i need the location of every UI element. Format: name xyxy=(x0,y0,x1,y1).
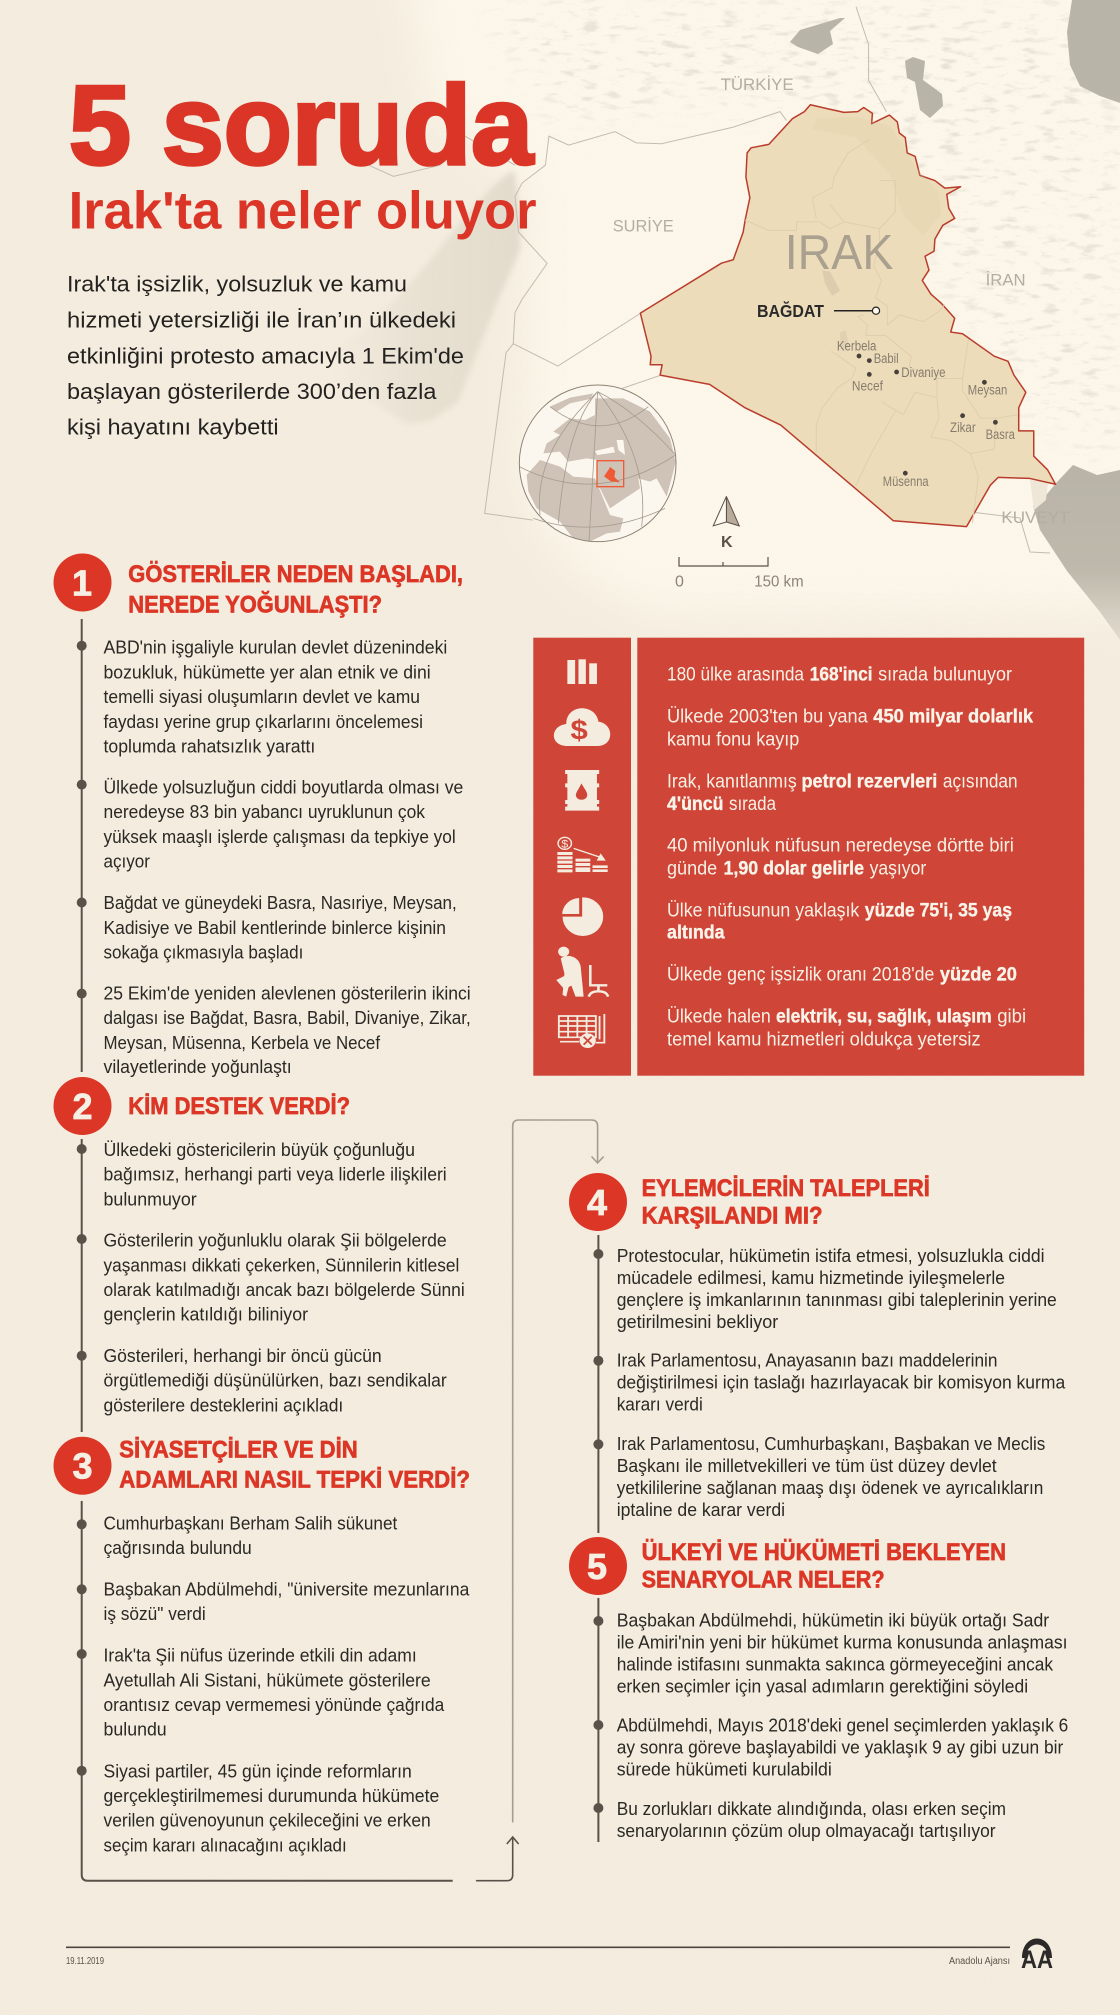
text 4: mücadele edilmesi, kamu hizmetinde iyileşmelerle xyxy=(617,1267,1005,1288)
text 4: Irak Parlamentosu, Anayasanın bazı maddelerinin xyxy=(617,1350,998,1371)
map labels: cities xyxy=(837,338,1015,489)
map: water bodies xyxy=(790,0,1120,640)
section 5 xyxy=(569,1537,1068,1842)
text 3: bulundu xyxy=(104,1719,167,1740)
fact: corruption rank: 168'inci xyxy=(810,665,873,686)
text 4: kararı verdi xyxy=(617,1394,703,1415)
badge 3: 3 xyxy=(72,1446,93,1487)
text 3 xyxy=(104,1512,470,1855)
flow connector: section 3 to section 4 xyxy=(477,1120,603,1881)
badge 2: 2 xyxy=(72,1086,93,1127)
badge 3 xyxy=(54,1437,112,1495)
heading 1 xyxy=(128,561,463,618)
text 4: getirilmesini bekliyor xyxy=(617,1311,778,1332)
text 2: Ülkedeki göstericilerin büyük çoğunluğu xyxy=(104,1139,415,1160)
map labels: cities: Zikar xyxy=(950,420,976,435)
fact: lost funds: kamu fonu kayıp xyxy=(667,729,799,750)
timeline 5 xyxy=(593,1598,603,1842)
text 1: dalgası ise Bağdat, Basra, Babil, Divaniye, Zikar, xyxy=(104,1007,471,1028)
timeline 3 xyxy=(77,1501,453,1881)
text 3: çağrısında bulundu xyxy=(104,1537,252,1558)
fact: lost funds: Ülkede 2003'ten bu yana xyxy=(667,707,868,728)
fact: public services: elektrik, su, sağlık, ulaşım xyxy=(776,1007,992,1028)
text 1: toplumda rahatsızlık yarattı xyxy=(104,736,315,756)
northern mountains xyxy=(812,117,941,236)
text 1: Ülkede yolsuzluğun ciddi boyutlarda olması ve xyxy=(104,777,463,798)
map: neighbouring country borders xyxy=(369,7,886,520)
text 5: Bu zorlukları dikkate alındığında, olası erken seçim xyxy=(617,1798,1006,1819)
badge 5: 5 xyxy=(587,1546,607,1587)
text 1: bozukluk, hükümette yer alan etnik ve dini xyxy=(104,661,431,682)
icon: money cloud: $ xyxy=(571,715,588,746)
fact: oil reserves: 4'üncü xyxy=(667,794,724,815)
text 2: Gösterilerin yoğunluklu olarak Şii bölgelerde xyxy=(104,1230,447,1251)
fact: corruption rank xyxy=(667,665,1013,686)
icon: failing services xyxy=(559,1014,604,1048)
text 5: Abdülmehdi, Mayıs 2018'deki genel seçimlerden yaklaşık 6 xyxy=(617,1715,1068,1736)
heading 1: NEREDE YOĞUNLAŞTI? xyxy=(128,590,382,618)
map labels: neighbouring countries: KUVEYT xyxy=(1001,508,1069,527)
section 4 xyxy=(569,1173,1066,1533)
heading 5 xyxy=(642,1539,1006,1593)
text 2: bulunmuyor xyxy=(104,1188,197,1209)
map labels: neighbouring countries xyxy=(613,75,1069,527)
text 3: orantısız cevap vermemesi yönünde çağrıda xyxy=(104,1694,445,1715)
panel: key facts xyxy=(637,638,1084,1076)
fact: public services: temel kamu hizmetleri oldukça yetersiz xyxy=(667,1029,981,1050)
badge 1 xyxy=(54,554,112,612)
fact: youth unemployment: yüzde 20 xyxy=(940,965,1017,986)
Mediterranean Sea xyxy=(330,170,520,424)
text 4: iptaline de karar verdi xyxy=(617,1499,785,1520)
Iraq land shape xyxy=(640,105,1055,527)
fact: public services xyxy=(667,1007,1026,1050)
section 1 xyxy=(54,554,471,1077)
text 1: yüksek maaşlı işlerde çalışması da tepkiye yol xyxy=(104,826,456,847)
text 1: Bağdat ve güneydeki Basra, Nasıriye, Meysan, xyxy=(104,892,457,913)
heading 4: KARŞILANDI MI? xyxy=(642,1202,823,1229)
map labels: cities: Kerbela xyxy=(837,338,877,353)
text 5: Başbakan Abdülmehdi, hükümetin iki büyük ortağı Sadr xyxy=(617,1610,1049,1631)
text 4: Başkanı ile milletvekilleri ve tüm üst düzey devlet xyxy=(617,1455,997,1476)
text 1: açıyor xyxy=(104,850,150,872)
text 5: erken seçimler için yasal adımların gerektiğini söyledi xyxy=(617,1676,1028,1697)
text 1: Meysan, Müsenna, Kerbela ve Necef xyxy=(104,1032,381,1053)
map labels: cities: Meysan xyxy=(968,383,1007,398)
intro text: Irak'ta işsizlik, yolsuzluk ve kamu xyxy=(67,272,407,297)
subtitle: Irak'ta neler oluyor xyxy=(69,181,537,240)
heading 3 xyxy=(119,1437,470,1494)
fact: corruption rank: sırada bulunuyor xyxy=(878,665,1013,686)
fact: oil reserves: petrol rezervleri xyxy=(802,771,937,792)
logo: Anadolu Agency: AA xyxy=(1021,1946,1053,1974)
text 3: verilen güvenoyunun çekileceğini ve erken xyxy=(104,1810,431,1831)
intro text: etkinliğini protesto amacıyla 1 Ekim'de xyxy=(67,343,464,368)
text 4: değiştirilmesi için taslağı hazırlayacak bir komisyon kurma xyxy=(617,1372,1066,1393)
text 3: Ayetullah Ali Sistani, hükümete gösterilere xyxy=(104,1669,431,1690)
map: Kuwait border xyxy=(971,512,1050,553)
map labels: neighbouring countries: İRAN xyxy=(986,270,1026,290)
fact: public services: gibi xyxy=(997,1007,1026,1028)
intro text: hizmeti yetersizliği ile İran’ın ülkedeki xyxy=(67,307,456,332)
fact: young population: yüzde 75'i, 35 yaş xyxy=(865,901,1012,922)
fact: poverty: 40 milyonluk nüfusun neredeyse dörtte biri xyxy=(667,836,1014,857)
text 3: Siyasi partiler, 45 gün içinde reformların xyxy=(104,1760,412,1781)
fact: oil reserves: açısından xyxy=(943,771,1018,792)
fact: poverty: günde xyxy=(667,859,717,880)
text 2: olarak katılmadığı ancak bazı bölgelerde Sünni xyxy=(104,1279,465,1300)
fact: youth unemployment: Ülkede genç işsizlik oranı 2018'de xyxy=(667,965,934,986)
fact: public services: Ülkede halen xyxy=(667,1007,771,1028)
text 4: gençlere iş imkanlarının tanınması gibi taleplerinin yerine xyxy=(617,1289,1057,1310)
scale bar xyxy=(675,557,804,591)
text 2: örgütlemediği düşünülürken, bazı sendikalar xyxy=(104,1370,447,1391)
province borders xyxy=(745,139,1018,523)
north arrow xyxy=(713,496,739,551)
north arrow: K xyxy=(721,534,733,551)
text 1: neredeyse 83 bin yabancı uyruklunun çok xyxy=(104,801,426,822)
heading 4 xyxy=(642,1175,930,1229)
fact: oil reserves: sırada xyxy=(729,794,776,815)
heading 3: ADAMLARI NASIL TEPKİ VERDİ? xyxy=(119,1467,470,1494)
map label: Baghdad with leader line xyxy=(757,300,880,321)
heading 5: ÜLKEYİ VE HÜKÜMETİ BEKLEYEN xyxy=(642,1539,1006,1566)
heading 2: KİM DESTEK VERDİ? xyxy=(128,1093,350,1120)
badge 5 xyxy=(569,1537,627,1595)
text 3: seçim kararı alınacağını açıkladı xyxy=(104,1834,347,1855)
timeline 2 xyxy=(77,1139,87,1432)
text 1: faydası yerine grup çıkarlarını öncelemesi xyxy=(104,711,423,732)
heading 5: SENARYOLAR NELER? xyxy=(642,1566,885,1593)
map labels: cities: Basra xyxy=(986,427,1015,442)
text 1 xyxy=(104,637,471,1077)
title: 5 soruda xyxy=(69,63,534,188)
text 3: gerçekleştirilmemesi durumunda hükümete xyxy=(104,1785,439,1806)
light land area of the map xyxy=(400,0,1120,615)
text 1: ABD'nin işgaliyle kurulan devlet düzenindeki xyxy=(104,637,447,658)
text 1: 25 Ekim'de yeniden alevlenen gösterilerin ikinci xyxy=(104,983,471,1004)
heading 4: EYLEMCİLERİN TALEPLERİ xyxy=(642,1175,930,1202)
terrain texture xyxy=(480,0,1120,470)
fact: oil reserves: Irak, kanıtlanmış xyxy=(667,771,797,792)
icon: money cloud xyxy=(554,708,610,746)
map labels: cities: Divaniye xyxy=(901,365,946,380)
fact: lost funds xyxy=(667,707,1034,750)
icon: falling income: $ xyxy=(561,837,569,850)
intro text: kişi hayatını kaybetti xyxy=(67,414,279,439)
text 1: Kadisiye ve Babil kentlerinde binlerce kişinin xyxy=(104,917,446,938)
timeline 4 xyxy=(593,1235,603,1533)
fact: young population xyxy=(667,901,1012,944)
scale bar: 0 xyxy=(675,574,684,591)
text 5: sürede hükümeti kurulabildi xyxy=(617,1759,832,1780)
heading 3: SİYASETÇİLER VE DİN xyxy=(119,1437,358,1464)
locator globe xyxy=(519,385,676,542)
fact: young population: altında xyxy=(667,923,725,944)
icon: pie chart xyxy=(562,897,603,936)
map: Iraq xyxy=(640,105,1055,527)
map labels: neighbouring countries: SURİYE xyxy=(613,216,674,236)
map labels: neighbouring countries: TÜRKİYE xyxy=(721,75,794,94)
text 4: yetkililerine sağlanan maaş dışı ödenek ve ayrıcalıkların xyxy=(617,1477,1043,1498)
text 2: gösterilere desteklerini açıkladı xyxy=(104,1394,343,1415)
text 3: Başbakan Abdülmehdi, "üniversite mezunlarına xyxy=(104,1578,470,1599)
icon: falling income xyxy=(557,837,608,872)
scale bar: 150 km xyxy=(754,574,804,591)
text 2 xyxy=(104,1139,465,1415)
section 3 xyxy=(54,1437,470,1881)
timeline 1 xyxy=(77,619,87,1072)
section 2 xyxy=(54,1077,465,1432)
text 1: temelli siyasi oluşumların devlet ve kamu xyxy=(104,686,420,707)
map labels: cities: Babil xyxy=(874,351,899,366)
text 2: bağımsız, herhangi parti veya liderle ilişkileri xyxy=(104,1164,447,1185)
badge 2 xyxy=(54,1077,112,1135)
badge 4: 4 xyxy=(587,1182,607,1223)
date: 19.11.2019 xyxy=(66,1956,104,1967)
text 5: halinde istifasını sunmakta sakınca görmeyeceğini ancak xyxy=(617,1654,1054,1675)
fact: young population: Ülke nüfusunun yaklaşık xyxy=(667,901,860,922)
fact: oil reserves xyxy=(667,771,1018,815)
fact: poverty: 1,90 dolar gelirle xyxy=(724,859,864,880)
text 2: Gösterileri, herhangi bir öncü gücün xyxy=(104,1345,382,1366)
text 5: ile Amiri'nin yeni bir hükümet kurma konusunda anlaşması xyxy=(617,1632,1068,1653)
icon: unemployed person xyxy=(556,947,608,997)
text 4 xyxy=(617,1245,1066,1520)
map label: Baghdad with leader line: BAĞDAT xyxy=(757,300,824,321)
text 2: gençlerin katıldığı biliniyor xyxy=(104,1304,308,1325)
text 3: Irak'ta Şii nüfus üzerinde etkili din adamı xyxy=(104,1645,417,1666)
intro text: başlayan gösterilerde 300’den fazla xyxy=(67,379,437,404)
map label: IRAK: IRAK xyxy=(785,226,894,280)
icon: bar chart xyxy=(567,659,597,684)
heading 1: GÖSTERİLER NEDEN BAŞLADI, xyxy=(128,561,463,588)
text 2: yaşanması dikkati çekerken, Sünnilerin kitlesel xyxy=(104,1254,459,1275)
fact: corruption rank: 180 ülke arasında xyxy=(667,665,804,686)
footer xyxy=(66,1938,1053,1974)
map labels: cities: Necef xyxy=(852,379,883,394)
salt lakes xyxy=(822,270,840,296)
intro text xyxy=(67,272,464,439)
inset: Iraq marker xyxy=(597,461,624,487)
badge 4 xyxy=(569,1173,627,1231)
fact: lost funds: 450 milyar dolarlık xyxy=(873,707,1034,728)
text 5: senaryolarının çözüm olup olmayacağı tartışılıyor xyxy=(617,1820,996,1841)
text 3: Cumhurbaşkanı Berham Salih sükunet xyxy=(104,1512,397,1533)
text 1: sokağa çıkmasıyla başladı xyxy=(104,941,303,962)
panel: key facts icons xyxy=(533,638,631,1076)
text 5: ay sonra göreve başlayabildi ve yaklaşık 9 ay gibi uzun bir xyxy=(617,1737,1063,1758)
map labels: cities: Müsenna xyxy=(883,474,929,489)
badge 1: 1 xyxy=(72,562,92,604)
text 4: Irak Parlamentosu, Cumhurbaşkanı, Başbakan ve Meclis xyxy=(617,1433,1045,1454)
text 5 xyxy=(617,1610,1068,1841)
text 1: vilayetlerinde yoğunlaştı xyxy=(104,1056,292,1077)
text 3: iş sözü" verdi xyxy=(104,1603,206,1624)
icon: oil barrel xyxy=(565,770,599,811)
fact: poverty: yaşıyor xyxy=(870,859,927,880)
text 4: Protestocular, hükümetin istifa etmesi, yolsuzlukla ciddi xyxy=(617,1245,1045,1266)
fact: poverty xyxy=(667,836,1014,880)
agency name: Anadolu Ajansı xyxy=(949,1956,1010,1967)
